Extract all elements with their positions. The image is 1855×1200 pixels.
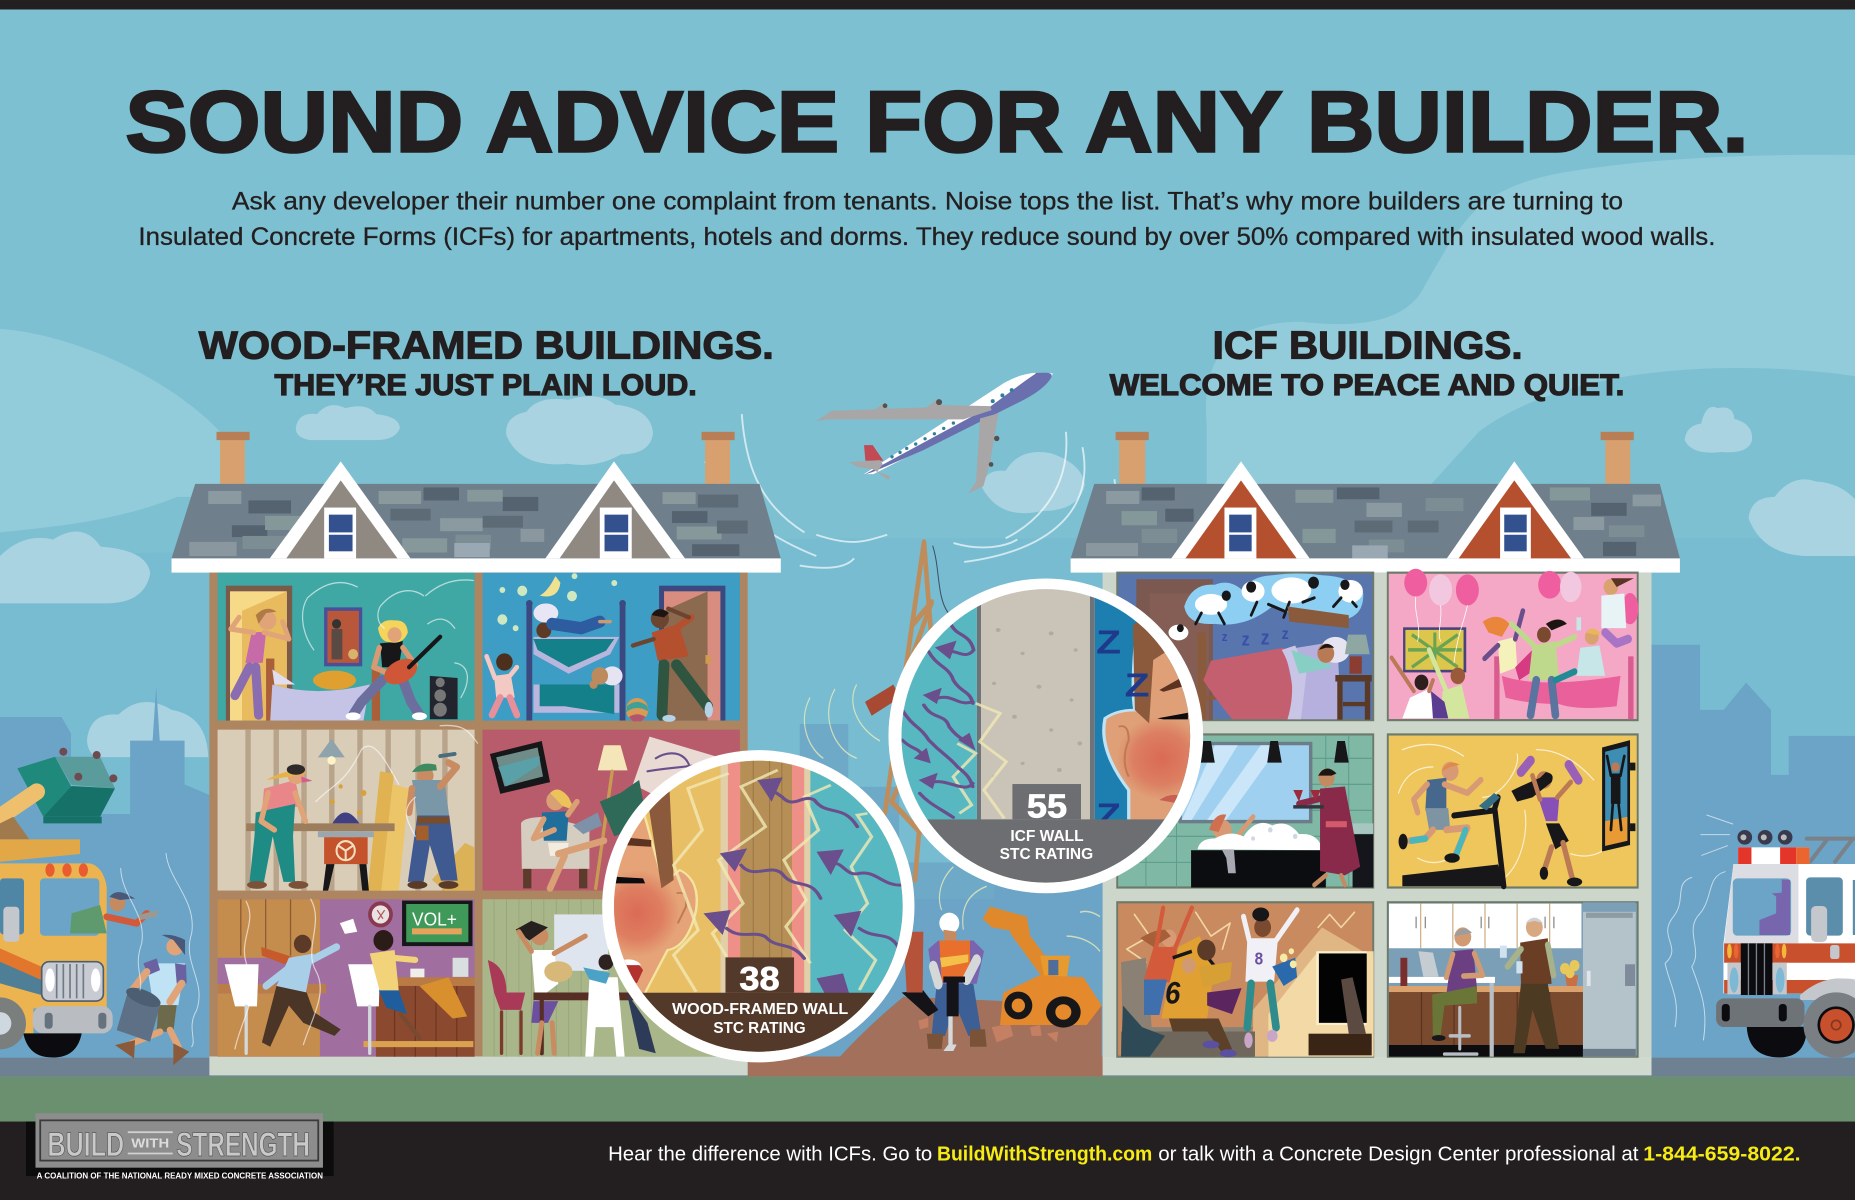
foundation: [1103, 1056, 1652, 1075]
face: [1102, 624, 1190, 824]
title: SOUND ADVICE FOR ANY BUILDER.: [125, 74, 1749, 170]
room: sleeping man and sheep: z: [1242, 629, 1250, 650]
construction site: [804, 685, 1102, 1057]
roof: [1071, 484, 1680, 558]
garbage truck and worker: [0, 748, 199, 1065]
frame: [209, 573, 748, 1056]
footer: BuildWithStrength.com: [937, 1143, 1152, 1166]
intro paragraph: [138, 188, 1715, 251]
sound arcs around plane: [705, 414, 1116, 568]
face: [614, 816, 698, 995]
walls: [1103, 573, 1652, 1056]
dormer right: [545, 461, 685, 558]
room: sleeping man and sheep: z: [1282, 626, 1289, 643]
room: gym: [1388, 734, 1638, 888]
arm: [0, 792, 37, 817]
circle: wood wall detail: [594, 747, 916, 1063]
logo: build with strength: WITH: [131, 1136, 169, 1151]
intro paragraph: Ask any developer their number one complaint from tenants. Noise tops the list. That’s why more builders are turning to: [232, 188, 1623, 215]
worker with can: [115, 935, 189, 1065]
room: workshop carpenters: [218, 725, 477, 891]
rating number: 55: [1027, 789, 1067, 826]
sound waves: [1665, 815, 1733, 1040]
room: seniors kitchen: [1388, 902, 1638, 1057]
room: rock guitarist bedroom: [218, 573, 475, 721]
sound arrows: [770, 788, 857, 827]
logo: build with strength: A COALITION OF THE NATIONAL READY MIXED CONCRETE ASSOCIATION: [37, 1171, 323, 1180]
heading: wood-framed buildings: THEY’RE JUST PLAIN LOUD.: [274, 369, 697, 402]
room: living room: [482, 730, 740, 891]
eave: [1071, 558, 1680, 573]
rating label: WOOD-FRAMED WALL: [672, 1001, 848, 1018]
heading: ICF buildings: [1110, 324, 1624, 402]
fire truck: [1665, 815, 1855, 1058]
footer: 1-844-659-8022.: [1643, 1143, 1801, 1166]
eave: [172, 558, 781, 573]
siren lights: [1737, 830, 1809, 864]
cab: [1716, 864, 1855, 1058]
heading: ICF buildings: WELCOME TO PEACE AND QUIET.: [1110, 369, 1624, 402]
room: sleeping man and sheep: z: [1222, 630, 1227, 644]
room: home theatre: 6: [1165, 976, 1181, 1011]
heading: wood-framed buildings: [199, 324, 774, 402]
generator: [902, 932, 938, 1016]
ladder: [1807, 839, 1855, 862]
room: dining room: [482, 899, 740, 1057]
cab: [0, 863, 113, 1057]
room: kitchen cabinets and TV: VOL+: [412, 909, 457, 929]
footer: or talk with a Concrete Design Center professional at: [1158, 1143, 1639, 1166]
room: sleeping man and sheep: [1117, 573, 1373, 720]
rating label: ICF WALL: [1010, 828, 1084, 845]
city skyline centre: [748, 724, 1103, 1059]
circle: ICF wall detail: [888, 577, 1206, 896]
room: pink party room: [1388, 569, 1638, 720]
logo: build with strength: STRENGTH: [176, 1126, 310, 1164]
intro paragraph: Insulated Concrete Forms (ICFs) for apartments, hotels and dorms. They reduce sound by over 50% compared with insulated wood walls.: [138, 224, 1715, 251]
city skyline right: [1652, 645, 1855, 1059]
sound arrows: [949, 625, 974, 655]
foundation: [209, 1056, 748, 1075]
dormer left: [1171, 461, 1310, 558]
room: bunk bed bedroom: [482, 573, 740, 722]
label band: [642, 992, 874, 1052]
rating label: STC RATING: [1000, 846, 1093, 863]
city skyline left: [0, 686, 209, 1059]
Z letters: Z: [1125, 666, 1150, 704]
roof: [172, 484, 781, 558]
top bar: [0, 0, 1855, 9]
dormer right: [1447, 461, 1584, 558]
room: home theatre: 8: [1255, 949, 1263, 969]
room: home theatre: [1117, 902, 1374, 1057]
footer: Hear the difference with ICFs. Go to: [608, 1143, 932, 1166]
Z letters: Z: [1096, 623, 1121, 661]
rating label: STC RATING: [713, 1020, 806, 1037]
chimneys: [216, 432, 735, 484]
Z letters: [1097, 630, 1148, 820]
rating number: 38: [739, 961, 780, 998]
clouds: [0, 396, 1855, 757]
house: wood-framed building: [172, 432, 781, 1075]
rooms: ICF building: [1117, 569, 1638, 1057]
rating label: [672, 1001, 848, 1037]
footer: [0, 1122, 1855, 1200]
stink waves: [121, 853, 199, 1047]
jackhammer worker: [927, 913, 987, 1051]
zigzag noise: [674, 773, 729, 992]
driver: [70, 892, 158, 933]
plane: [816, 373, 1053, 493]
chimneys: [1116, 432, 1634, 484]
zigzag noise: [976, 703, 1006, 818]
label band: [927, 819, 1164, 883]
heading: wood-framed buildings: WOOD-FRAMED BUILDINGS.: [199, 324, 774, 367]
logo: build with strength: [26, 1113, 334, 1180]
ground: pavement, dirt and grass: [0, 1056, 1855, 1123]
rating label: [1000, 828, 1093, 863]
logo: build with strength: BUILD: [47, 1126, 124, 1164]
room: sleeping man and sheep: z: [1261, 627, 1270, 649]
room: bathroom: [1117, 734, 1373, 888]
crane tower: [865, 542, 948, 880]
dormer left: [270, 461, 411, 558]
heading: ICF buildings: ICF BUILDINGS.: [1213, 324, 1523, 367]
ICF building: [1071, 432, 1680, 1075]
sound arcs: [804, 685, 1100, 951]
room: kitchen cabinets and TV: [218, 899, 475, 1057]
trash bin: [17, 748, 117, 823]
Z letters: Z: [1096, 796, 1121, 834]
rooms: wood-framed building: [218, 573, 740, 1057]
loader: [983, 907, 1102, 1028]
dirt mound: [840, 997, 1102, 1057]
